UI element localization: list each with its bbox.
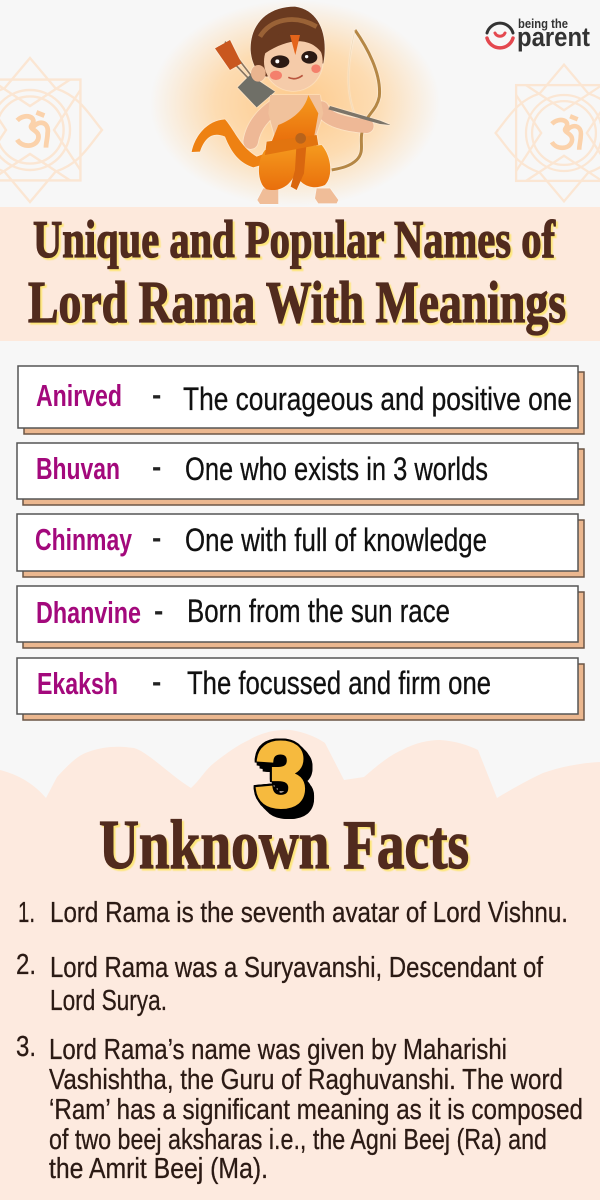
fact 3: the Amrit Beej (Ma).	[49, 1153, 268, 1185]
logo wordmark: being the	[518, 16, 568, 31]
fact 2	[16, 949, 544, 1017]
name card: Ekaksh: The focussed and firm one	[187, 665, 491, 701]
legs and feet	[257, 142, 338, 204]
torso and drape	[265, 95, 323, 155]
fact 3	[16, 1031, 583, 1185]
name card: Chinmay: -	[152, 522, 161, 553]
scarf	[192, 119, 290, 167]
name card: Bhuvan: -	[152, 451, 161, 482]
bow	[332, 30, 380, 170]
illustration: child Lord Rama with bow	[192, 7, 391, 204]
icon: left om mandala	[0, 58, 102, 202]
fact 2: Lord Surya.	[50, 985, 167, 1017]
title band	[0, 207, 600, 341]
name card: Dhanvine: -	[154, 595, 163, 626]
name card: Ekaksh	[17, 658, 584, 720]
quiver and arrows	[215, 40, 275, 107]
hero glow	[150, 0, 440, 207]
name card: Chinmay: One with full of knowledge	[185, 522, 487, 558]
facts heading: Unknown Facts	[99, 807, 469, 884]
head	[251, 7, 325, 91]
logo: being the parent	[487, 16, 590, 52]
name card: Chinmay: Chinmay	[35, 522, 133, 557]
name card: Dhanvine: Born from the sun race	[187, 593, 450, 629]
icon: right om mandala	[496, 65, 600, 201]
name card: Bhuvan: Bhuvan	[36, 451, 120, 486]
name card: Dhanvine	[17, 586, 584, 648]
name card: Anirved	[18, 366, 584, 434]
name card: Bhuvan	[17, 443, 584, 505]
fact 1: 1.	[18, 897, 35, 929]
name card: Anirved: Anirved	[36, 378, 122, 413]
logo mark	[487, 23, 513, 48]
title	[28, 211, 566, 335]
name card: Bhuvan: One who exists in 3 worlds	[185, 451, 488, 487]
name card: Ekaksh: -	[152, 666, 161, 697]
big number 3: 3	[256, 725, 306, 826]
logo: being the parent: parent	[517, 22, 590, 52]
fact 3: Lord Rama’s name was given by Maharishi	[49, 1034, 507, 1066]
fact 3: 3.	[16, 1031, 36, 1063]
arrow	[328, 106, 391, 125]
arms	[251, 107, 367, 142]
name card: Ekaksh: Ekaksh	[37, 666, 118, 701]
name card: Dhanvine: Dhanvine	[36, 595, 141, 630]
name card: Anirved: -	[152, 379, 161, 410]
name card: Chinmay	[17, 514, 584, 577]
fact 2: 2.	[16, 949, 36, 981]
facts panel wavy background	[0, 730, 600, 1200]
